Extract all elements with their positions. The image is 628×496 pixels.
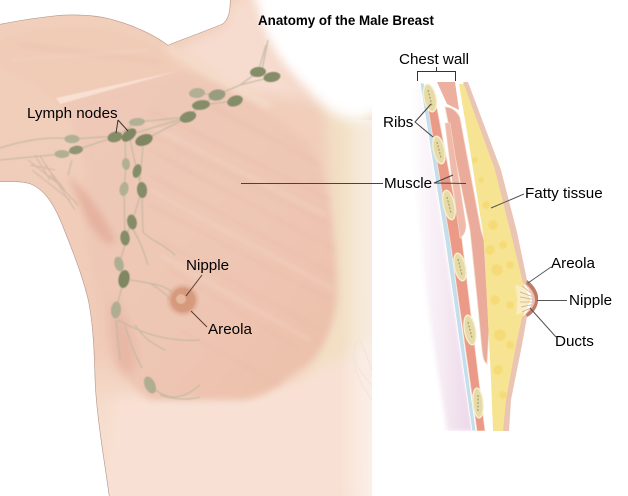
bracket: chest wall: [418, 67, 456, 81]
muscle highlights: [10, 50, 335, 340]
label: lymph nodes: [27, 105, 128, 133]
label: nipple on chest: [186, 257, 229, 296]
label: ducts: [530, 308, 594, 350]
lymph vessels: [0, 40, 272, 399]
illustration: male chest front view: [0, 0, 400, 496]
neck tone: [182, 0, 298, 99]
label: nipple on section: Nipple: [569, 292, 612, 309]
areola layer: [526, 280, 538, 317]
label: areola on chest: Areola: [208, 321, 252, 338]
pectoral muscle: [125, 92, 337, 402]
pectoralis major upper: [437, 82, 459, 110]
muscle fibres: [20, 45, 335, 385]
label: ribs: [383, 104, 433, 137]
areola: [167, 284, 199, 316]
illustration: breast cross-section: [410, 82, 538, 431]
title: Anatomy of the Male Breast: [258, 12, 434, 28]
ducts: [520, 286, 532, 312]
neck and shoulder white fade: [248, 0, 372, 125]
side chest shadow: [112, 314, 136, 372]
right ribs sketch: [352, 335, 372, 400]
flank and side tone: [313, 112, 368, 368]
label: ribs: Ribs: [383, 114, 414, 131]
lymph nodes: [54, 66, 281, 395]
label: fatty tissue: Fatty tissue: [525, 185, 603, 202]
lung tissue: [422, 123, 472, 431]
underarm hair: [28, 155, 78, 210]
label: areola on chest: [191, 311, 252, 338]
label: areola on section: Areola: [551, 255, 595, 272]
right edge fade: [349, 120, 372, 496]
label: chest wall: Chest wall: [399, 51, 469, 68]
label: muscle: Muscle: [384, 175, 432, 192]
armpit shadow: [68, 175, 115, 244]
deltoid muscle: [0, 28, 175, 100]
label: muscle: [241, 175, 466, 192]
label: ducts: Ducts: [555, 333, 594, 350]
label: nipple on section: [537, 292, 612, 309]
label: nipple on chest: Nipple: [186, 257, 229, 274]
label: lymph nodes: Lymph nodes: [27, 105, 118, 122]
fat lobules: [472, 157, 514, 399]
skin base: [0, 0, 372, 496]
nipple: [176, 294, 186, 304]
skin layer: [463, 82, 538, 431]
pectoralis major: [445, 107, 489, 364]
pleura: [420, 83, 476, 431]
label: fatty tissue: [491, 185, 603, 208]
pectoralis minor: [445, 123, 466, 238]
body outline: [0, 0, 230, 496]
fatty tissue: [459, 84, 530, 431]
label: areola on section: [528, 255, 595, 283]
ribs: [421, 83, 484, 418]
lower abdomen light skin: [136, 350, 370, 406]
rib texture: [428, 90, 478, 411]
intercostal muscle: [428, 108, 485, 431]
clavicle highlight: [56, 73, 170, 104]
duct area: [515, 285, 528, 315]
